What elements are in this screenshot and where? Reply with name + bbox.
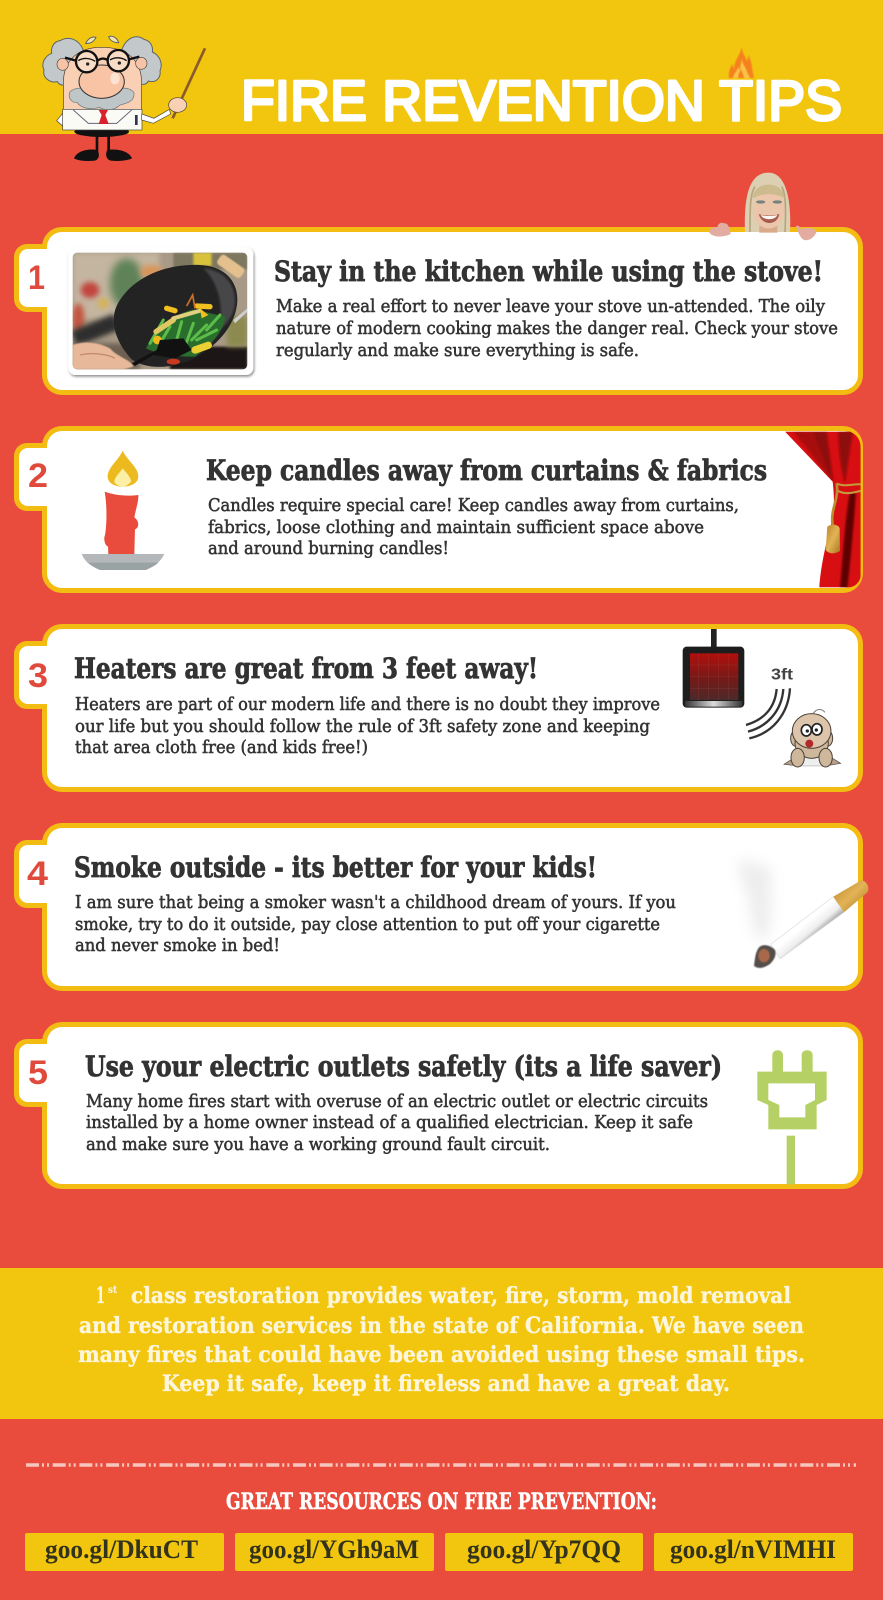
body text: installed by a home owner instead of a qualified electrician. Keep it safe bbox=[86, 1112, 693, 1133]
header band bbox=[0, 0, 883, 134]
body text: I am sure that being a smoker wasn't a childhood dream of yours. If you bbox=[75, 892, 676, 913]
link 2: goo.gl/YGh9aM bbox=[249, 1535, 419, 1564]
moustache bbox=[69, 88, 134, 110]
number: 3 bbox=[28, 657, 48, 695]
closing text: 1 bbox=[96, 1283, 105, 1309]
coat and tie bbox=[63, 109, 142, 130]
link 4: goo.gl/nVIMHI bbox=[670, 1535, 836, 1564]
body text: fabrics, loose clothing and maintain sufficient space above bbox=[208, 517, 704, 538]
body text: regularly and make sure everything is safe. bbox=[276, 340, 639, 361]
body text bbox=[86, 1091, 708, 1155]
ember bbox=[754, 945, 776, 968]
glasses bbox=[65, 50, 139, 72]
arm and hand bbox=[57, 98, 187, 126]
body text: Many home fires start with overuse of an electric outlet or electric circuits bbox=[86, 1091, 708, 1112]
body text: and never smoke in bed! bbox=[75, 935, 280, 956]
icon: burning cigarette with smoke bbox=[740, 855, 868, 968]
photo: wok with vegetables bbox=[68, 247, 253, 375]
card frame bbox=[14, 1022, 863, 1189]
hair bbox=[745, 173, 790, 232]
body text: smoke, try to do it outside, pay close attention to put off your cigarette bbox=[75, 914, 660, 935]
number: 1 bbox=[28, 259, 45, 297]
number: 5 bbox=[28, 1054, 48, 1092]
body text bbox=[208, 495, 739, 559]
number: 4 bbox=[27, 855, 48, 893]
card frame bbox=[14, 823, 863, 991]
heading: Use your electric outlets safetly (its a life saver) bbox=[85, 1050, 722, 1083]
heading: Heaters are great from 3 feet away! bbox=[74, 652, 538, 685]
icon: woman peeking over card bbox=[709, 173, 817, 240]
baby bbox=[784, 709, 841, 767]
3ft label: 3ft bbox=[771, 666, 794, 683]
body text: our life but you should follow the rule of 3ft safety zone and keeping bbox=[75, 716, 650, 737]
body text: and make sure you have a working ground fault circuit. bbox=[86, 1134, 550, 1155]
heater bbox=[683, 629, 744, 708]
icon: professor with pointer bbox=[43, 36, 205, 161]
heading: Keep candles away from curtains & fabrics bbox=[206, 454, 767, 487]
panel 4: smoking bbox=[14, 823, 868, 991]
hair bbox=[43, 36, 161, 85]
body text: Heaters are part of our modern life and there is no doubt they improve bbox=[75, 694, 660, 715]
icon: candle bbox=[82, 451, 164, 570]
number: 2 bbox=[28, 457, 48, 495]
panel 5: electric outlets bbox=[14, 1022, 863, 1189]
face bbox=[753, 185, 785, 233]
card frame bbox=[14, 624, 863, 792]
pointer bbox=[173, 48, 205, 118]
resources heading: GREAT RESOURCES ON FIRE PREVENTION: bbox=[226, 1489, 657, 1515]
body text: Make a real effort to never leave your stove un-attended. The oily bbox=[276, 296, 826, 317]
panel 1: kitchen bbox=[14, 227, 863, 395]
body text: and around burning candles! bbox=[208, 538, 449, 559]
icon: electric plug bbox=[757, 1050, 827, 1184]
body text bbox=[75, 694, 660, 758]
link 2 bbox=[235, 1533, 434, 1571]
link 4 bbox=[654, 1533, 853, 1571]
icon: heater, 3ft distance and baby bbox=[683, 629, 841, 767]
closing text: and restoration services in the state of California. We have seen bbox=[79, 1313, 804, 1339]
heading: Smoke outside - its better for your kids! bbox=[74, 851, 597, 884]
card frame bbox=[14, 227, 863, 395]
link buttons bbox=[25, 1533, 853, 1571]
link 3 bbox=[445, 1533, 643, 1571]
link 1: goo.gl/DkuCT bbox=[45, 1535, 198, 1564]
title: FIRE REVENTION TIPS bbox=[241, 69, 842, 133]
cigarette body bbox=[771, 880, 868, 959]
body text bbox=[276, 296, 838, 361]
closing text: Keep it safe, keep it fireless and have a great day. bbox=[162, 1371, 730, 1397]
closing band bbox=[0, 1268, 883, 1419]
hands bbox=[709, 223, 817, 240]
icon: flame over title bbox=[729, 47, 754, 78]
closing text: st bbox=[108, 1285, 117, 1296]
body text: nature of modern cooking makes the danger real. Check your stove bbox=[276, 318, 838, 339]
body text bbox=[75, 892, 676, 956]
link 3: goo.gl/Yp7QQ bbox=[467, 1535, 621, 1564]
nose bbox=[79, 65, 124, 98]
closing text bbox=[78, 1283, 805, 1397]
distance arcs bbox=[746, 688, 790, 738]
panel 2: candles bbox=[14, 426, 863, 593]
closing text: many fires that could have been avoided using these small tips. bbox=[78, 1342, 805, 1368]
link 1 bbox=[25, 1533, 224, 1571]
closing text: class restoration provides water, fire, storm, mold removal bbox=[131, 1283, 791, 1309]
icon: red curtain bbox=[783, 430, 863, 590]
legs and shoes bbox=[74, 126, 132, 161]
body text: that area cloth free (and kids free!) bbox=[75, 737, 368, 758]
card frame bbox=[14, 426, 863, 593]
smoke bbox=[740, 855, 772, 938]
body text: Candles require special care! Keep candles away from curtains, bbox=[208, 495, 739, 516]
panel 3: heaters bbox=[14, 624, 863, 792]
head bbox=[57, 47, 147, 120]
